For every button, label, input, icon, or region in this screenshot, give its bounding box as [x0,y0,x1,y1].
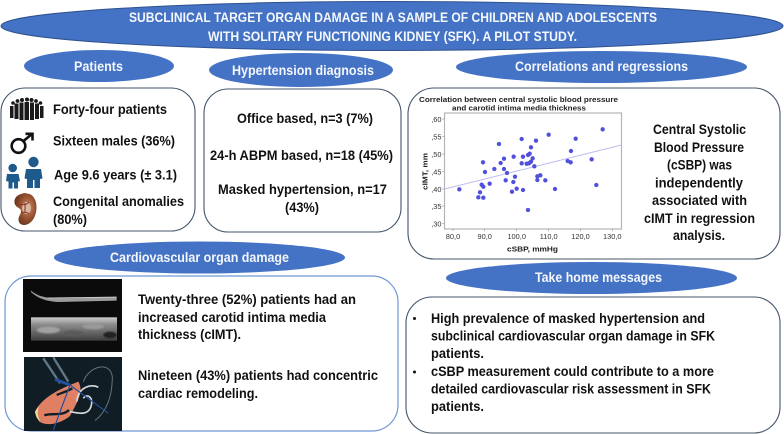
y axis labels: ,45 [431,168,442,176]
text: carotid finding [138,292,356,342]
heading: Patients: Patients [74,59,123,74]
chart title: Correlation between central systolic blood pressure [419,95,618,104]
message 1 [413,311,715,361]
x axis labels: 120,0 [571,232,590,241]
text: congenital anomalies [53,194,184,227]
text: cSBP finding: Central Systolic [653,122,746,137]
text: congenital anomalies: (80%) [53,212,87,227]
text: carotid finding: increased carotid intima media [138,310,326,325]
panel: take home messages [406,297,780,433]
x axis labels: 100,0 [507,232,526,241]
y axis labels: ,35 [431,202,442,211]
text: cSBP finding: (cSBP) was [667,158,732,172]
message 1: patients. [431,346,484,361]
message 2 [413,364,714,414]
panel: cardiovascular organ damage [5,276,398,431]
chart title [419,95,618,112]
title banner: SUBCLINICAL TARGET ORGAN DAMAGE IN A SAMPLE OF CHILDREN AND ADOLESCENTS [129,10,657,25]
text: sixteen males: Sixteen males (36%) [53,134,175,148]
regression line [444,145,622,189]
x axis labels: 110,0 [540,232,558,241]
x axis title: cSBP, mmHg [507,244,559,254]
icon: group of people [10,98,44,120]
chart title: and carotid intima media thickness [452,104,586,112]
x axis labels [446,232,622,241]
x axis labels: 90,0 [478,232,492,241]
x axis labels: 130,0 [603,232,622,241]
y axis labels [431,115,442,228]
heading: Hypertension diagnosis: Hypertension diagnosis [232,63,374,78]
message 1: subclinical cardiovascular organ damage in SFK [431,328,715,344]
data points [457,127,605,212]
scatter chart [419,95,622,254]
text: congenital anomalies: Congenital anomalies [53,194,184,209]
icon: children [6,157,42,188]
heading: Take home messages [446,262,737,294]
x axis labels: 80,0 [446,232,460,241]
heading: Correlations and regressions: Correlations and regressions [515,59,688,74]
text: age: Age 9.6 years (± 3.1) [54,168,177,182]
text: office based: Office based, n=3 (7%) [237,111,373,126]
text: cSBP finding: analysis. [673,228,725,243]
text: cSBP finding [644,122,755,243]
heading: Cardiovascular organ damage [54,242,345,274]
text: cSBP finding: Blood Pressure [654,140,744,155]
message 2: cSBP measurement could contribute to a more [431,364,714,379]
image: heart illustration [24,357,122,431]
y axis labels: ,40 [431,185,442,194]
y axis labels: ,60 [431,115,442,124]
title banner [1,2,783,50]
text: forty-four patients: Forty-four patients [53,102,167,117]
y axis title: cIMT, mm [420,153,430,190]
y axis labels: ,55 [431,132,442,142]
title banner: WITH SOLITARY FUNCTIONING KIDNEY (SFK). A PILOT STUDY. [208,29,577,44]
heading: Cardiovascular organ damage: Cardiovascular organ damage [110,250,289,265]
panel: hypertension diagnosis [204,89,401,232]
heading: Patients [24,50,174,82]
text: cSBP finding: cIMT in regression [644,211,755,226]
text: masked hypertension: (43%) [285,200,319,215]
text: cardiac finding [138,368,378,401]
heading: Take home messages: Take home messages [535,270,662,285]
message 2: patients. [431,399,484,414]
text: carotid finding: Twenty-three (52%) patients had an [138,292,356,307]
text: masked hypertension [218,182,387,215]
y axis labels: ,50 [431,150,442,159]
icon: kidney [14,193,37,225]
message 2: detailed cardiovascular risk assessment in SFK [431,382,711,396]
panel: correlations and regressions [408,88,780,259]
text: carotid finding: thickness (cIMT). [138,327,241,342]
message 1: High prevalence of masked hypertension and [431,311,705,326]
panel: patients [1,88,195,231]
text: ABPM based: 24-h ABPM based, n=18 (45%) [210,148,393,163]
text: cardiac finding: cardiac remodeling. [138,386,258,401]
image: carotid ultrasound [23,279,122,352]
heading: Hypertension diagnosis [209,53,393,87]
heading: Correlations and regressions [456,51,747,83]
text: cardiac finding: Nineteen (43%) patients had concentric [138,368,378,383]
text: cSBP finding: associated with [652,193,747,208]
text: cSBP finding: independently [655,176,743,190]
text: masked hypertension: Masked hypertension, n=17 [218,182,387,197]
icon: male symbol [12,134,32,153]
y axis labels: ,30 [431,220,442,228]
